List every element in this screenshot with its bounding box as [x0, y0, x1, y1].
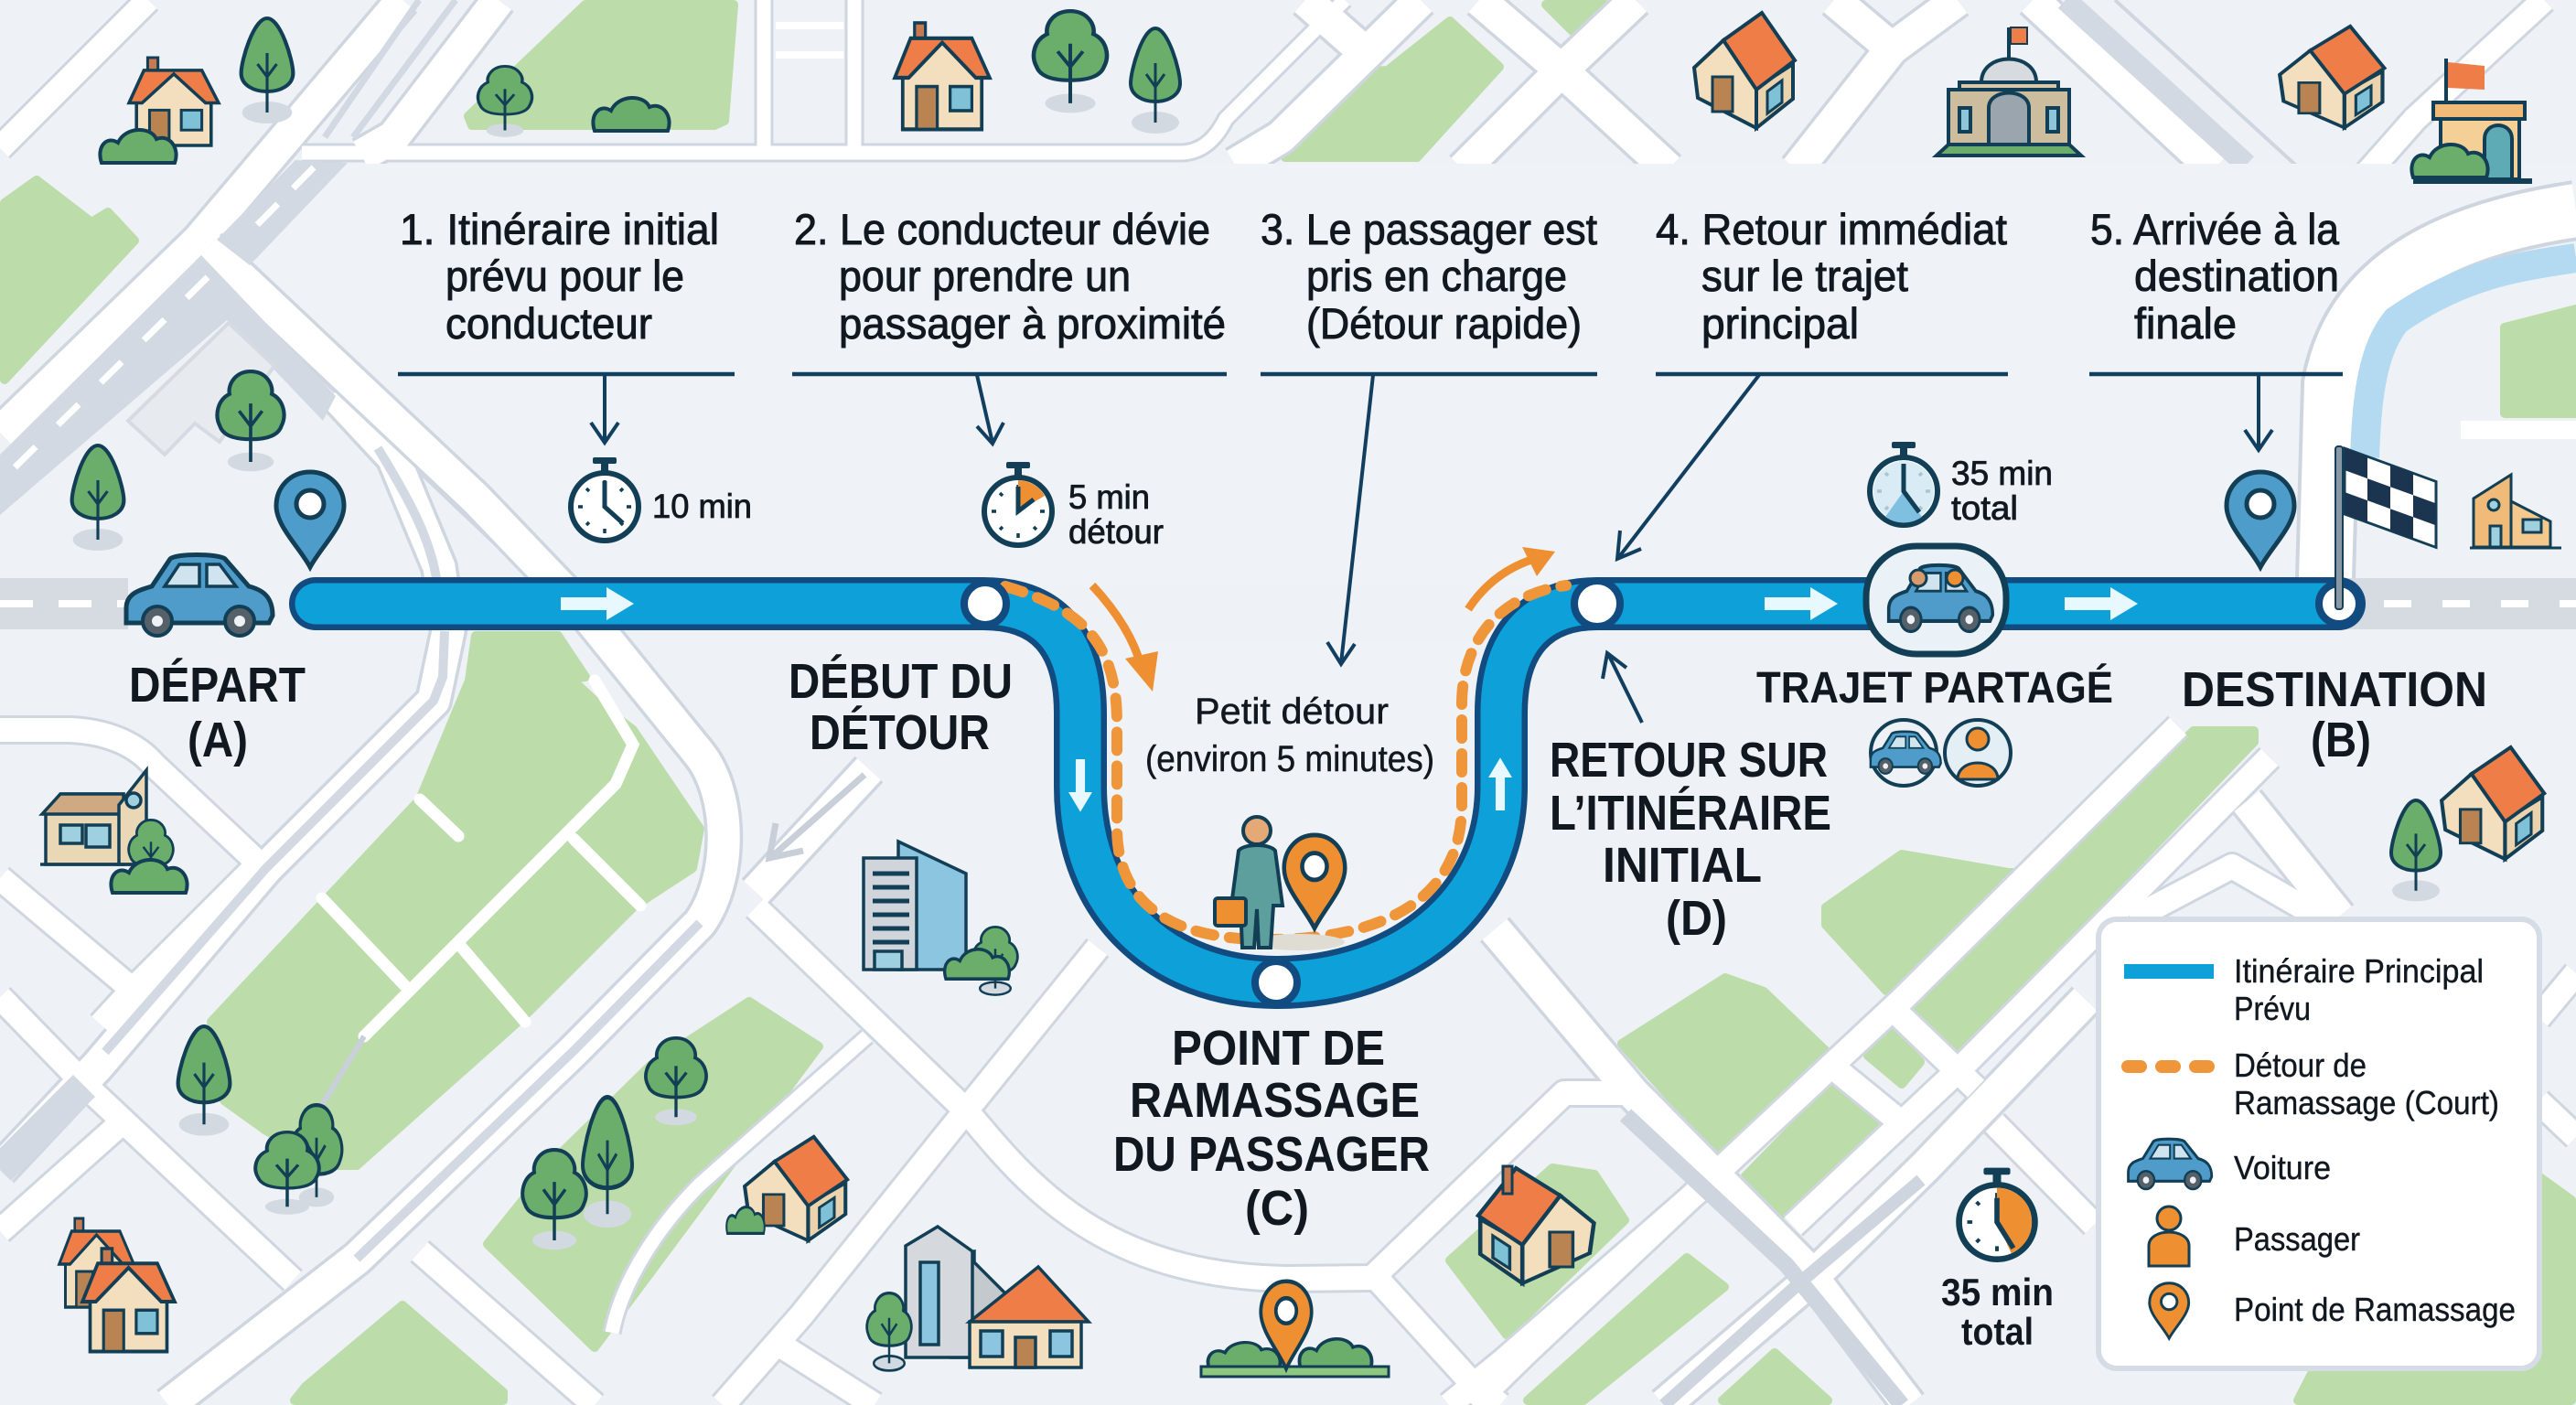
- step 3 text: (Détour rapide): [1306, 299, 1582, 348]
- step 5 text: [2090, 205, 2340, 348]
- label: start of detour: DÉBUT DU: [789, 654, 1013, 709]
- timer: 10 min: 10 min: [652, 488, 752, 525]
- house: bottom right: [1478, 1166, 1594, 1283]
- faint parking lot: [128, 323, 274, 455]
- grey dual carriageways: [0, 160, 1921, 1405]
- legend: passenger: Passager: [2234, 1220, 2360, 1258]
- buildings and house: bottom: [867, 1227, 1089, 1370]
- legend: detour: Ramassage (Court): [2234, 1084, 2499, 1121]
- step 1 text: prévu pour le: [445, 252, 684, 300]
- label: pickup point: RAMASSAGE: [1130, 1073, 1420, 1128]
- house: top right 1: [1694, 13, 1795, 128]
- timer: 35 min total: 35 min: [1951, 455, 2053, 492]
- total time timer: [1941, 1168, 2054, 1353]
- start pin: [276, 472, 344, 567]
- legend: detour: Détour de: [2234, 1046, 2367, 1084]
- legend: main route: Prévu: [2234, 990, 2311, 1027]
- orange pickup detour dashed: [1005, 585, 1566, 939]
- river and curved road: [2325, 210, 2576, 578]
- step 4 text: principal: [1701, 299, 1859, 348]
- label: pickup point: (C): [1245, 1181, 1309, 1236]
- house: top right 2: [2280, 27, 2385, 128]
- route direction arrows: [561, 587, 2138, 812]
- orange curved arrow up: [1468, 547, 1555, 609]
- timer: 35 min total: [1870, 442, 2053, 527]
- office with bushes: [864, 842, 1017, 995]
- timer: 35 min total: total: [1951, 489, 2018, 527]
- step 2 text: 2. Le conducteur dévie: [794, 205, 1210, 253]
- step 3 text: [1261, 205, 1597, 348]
- label: destination: (B): [2311, 713, 2371, 767]
- destination pin: [2227, 472, 2294, 567]
- label: return: INITIAL: [1603, 838, 1762, 893]
- label: destination: [2182, 662, 2487, 767]
- label: depart: (A): [188, 713, 248, 767]
- house: bottom left: [59, 1218, 175, 1352]
- label: pickup point: DU PASSAGER: [1113, 1127, 1430, 1182]
- step 1 text: conducteur: [445, 299, 652, 348]
- legend: car: Voiture: [2234, 1149, 2331, 1186]
- step 3 text: pris en charge: [1306, 252, 1567, 300]
- step 5 text: destination: [2134, 252, 2339, 300]
- label: pickup point: [1113, 1021, 1430, 1236]
- monument: [1937, 27, 2081, 156]
- route labels: [129, 654, 2487, 1236]
- step 4 text: 4. Retour immédiat: [1656, 205, 2007, 253]
- label: shared ride: TRAJET PARTAGÉ: [1756, 663, 2113, 713]
- label: depart: [129, 658, 306, 767]
- detour caption: [1145, 692, 1434, 779]
- main diagonal road: [209, 247, 576, 604]
- label: return: (D): [1666, 891, 1727, 946]
- legend: pickup point: [2150, 1283, 2516, 1338]
- step 2 text: pour prendre un: [839, 252, 1131, 300]
- grey road arrow: [769, 775, 864, 858]
- total time timer: total: [1961, 1310, 2034, 1353]
- label: start of detour: [789, 654, 1013, 760]
- detour caption: Petit détour: [1195, 692, 1389, 732]
- label: depart: DÉPART: [129, 658, 306, 713]
- step 5 text: 5. Arrivée à la: [2090, 205, 2340, 253]
- legend: main route: [2124, 952, 2484, 1027]
- legend: car: [2129, 1139, 2331, 1189]
- timer: 5 min detour: détour: [1068, 513, 1164, 551]
- label: start of detour: DÉTOUR: [810, 705, 990, 760]
- bottom pin with shrubs: [1201, 1282, 1389, 1377]
- orange curved arrow down: [1092, 585, 1158, 692]
- step 1 text: [400, 205, 719, 348]
- timer: 5 min detour: 5 min: [1068, 478, 1150, 516]
- total time timer: 35 min: [1941, 1271, 2054, 1314]
- pickup pin: [1284, 835, 1345, 928]
- house: top centre: [895, 23, 990, 129]
- legend: detour: [2128, 1046, 2499, 1121]
- detour caption: (environ 5 minutes): [1145, 739, 1434, 779]
- legend: passenger: [2149, 1207, 2360, 1266]
- passenger with briefcase: [1215, 817, 1345, 950]
- legend panel: [2098, 919, 2539, 1368]
- house: east: [2442, 747, 2544, 859]
- step 5 text: finale: [2134, 299, 2237, 348]
- step 1 text: 1. Itinéraire initial: [400, 205, 719, 253]
- shared ride badge: [1866, 546, 2006, 654]
- label: destination: DESTINATION: [2182, 662, 2487, 717]
- step 4 text: sur le trajet: [1701, 252, 1908, 300]
- route nodes: [964, 581, 2359, 1003]
- house: top left: [100, 58, 219, 163]
- label: return: [1550, 733, 1831, 946]
- small car and passenger icons: [1871, 720, 2011, 786]
- house: bottom middle: [726, 1137, 847, 1240]
- flag building: [2411, 59, 2532, 181]
- side roads east and west of the route: [0, 578, 2576, 629]
- legend: pickup point: Point de Ramassage: [2234, 1291, 2516, 1328]
- start car: [126, 554, 273, 636]
- label: return: RETOUR SUR: [1550, 733, 1828, 788]
- house and tower: west: [40, 770, 188, 893]
- checkered finish flag: [2335, 446, 2436, 609]
- step 4 text: [1656, 205, 2007, 348]
- plain ground behind the detour: [1107, 640, 1473, 951]
- timer: 5 min detour: [984, 462, 1164, 551]
- label: return: L’ITINÉRAIRE: [1550, 786, 1831, 841]
- step 2 text: [794, 205, 1226, 348]
- step 2 text: passager à proximité: [839, 299, 1226, 348]
- label: pickup point: POINT DE: [1172, 1021, 1385, 1076]
- step rules and leader arrows: [398, 374, 2343, 723]
- legend: main route: Itinéraire Principal: [2234, 952, 2484, 990]
- small building east of destination: [2470, 475, 2561, 548]
- timer: 10 min: [571, 457, 752, 541]
- light text area: [250, 164, 2576, 585]
- main route with detour: [316, 604, 2339, 982]
- step 3 text: 3. Le passager est: [1261, 205, 1597, 253]
